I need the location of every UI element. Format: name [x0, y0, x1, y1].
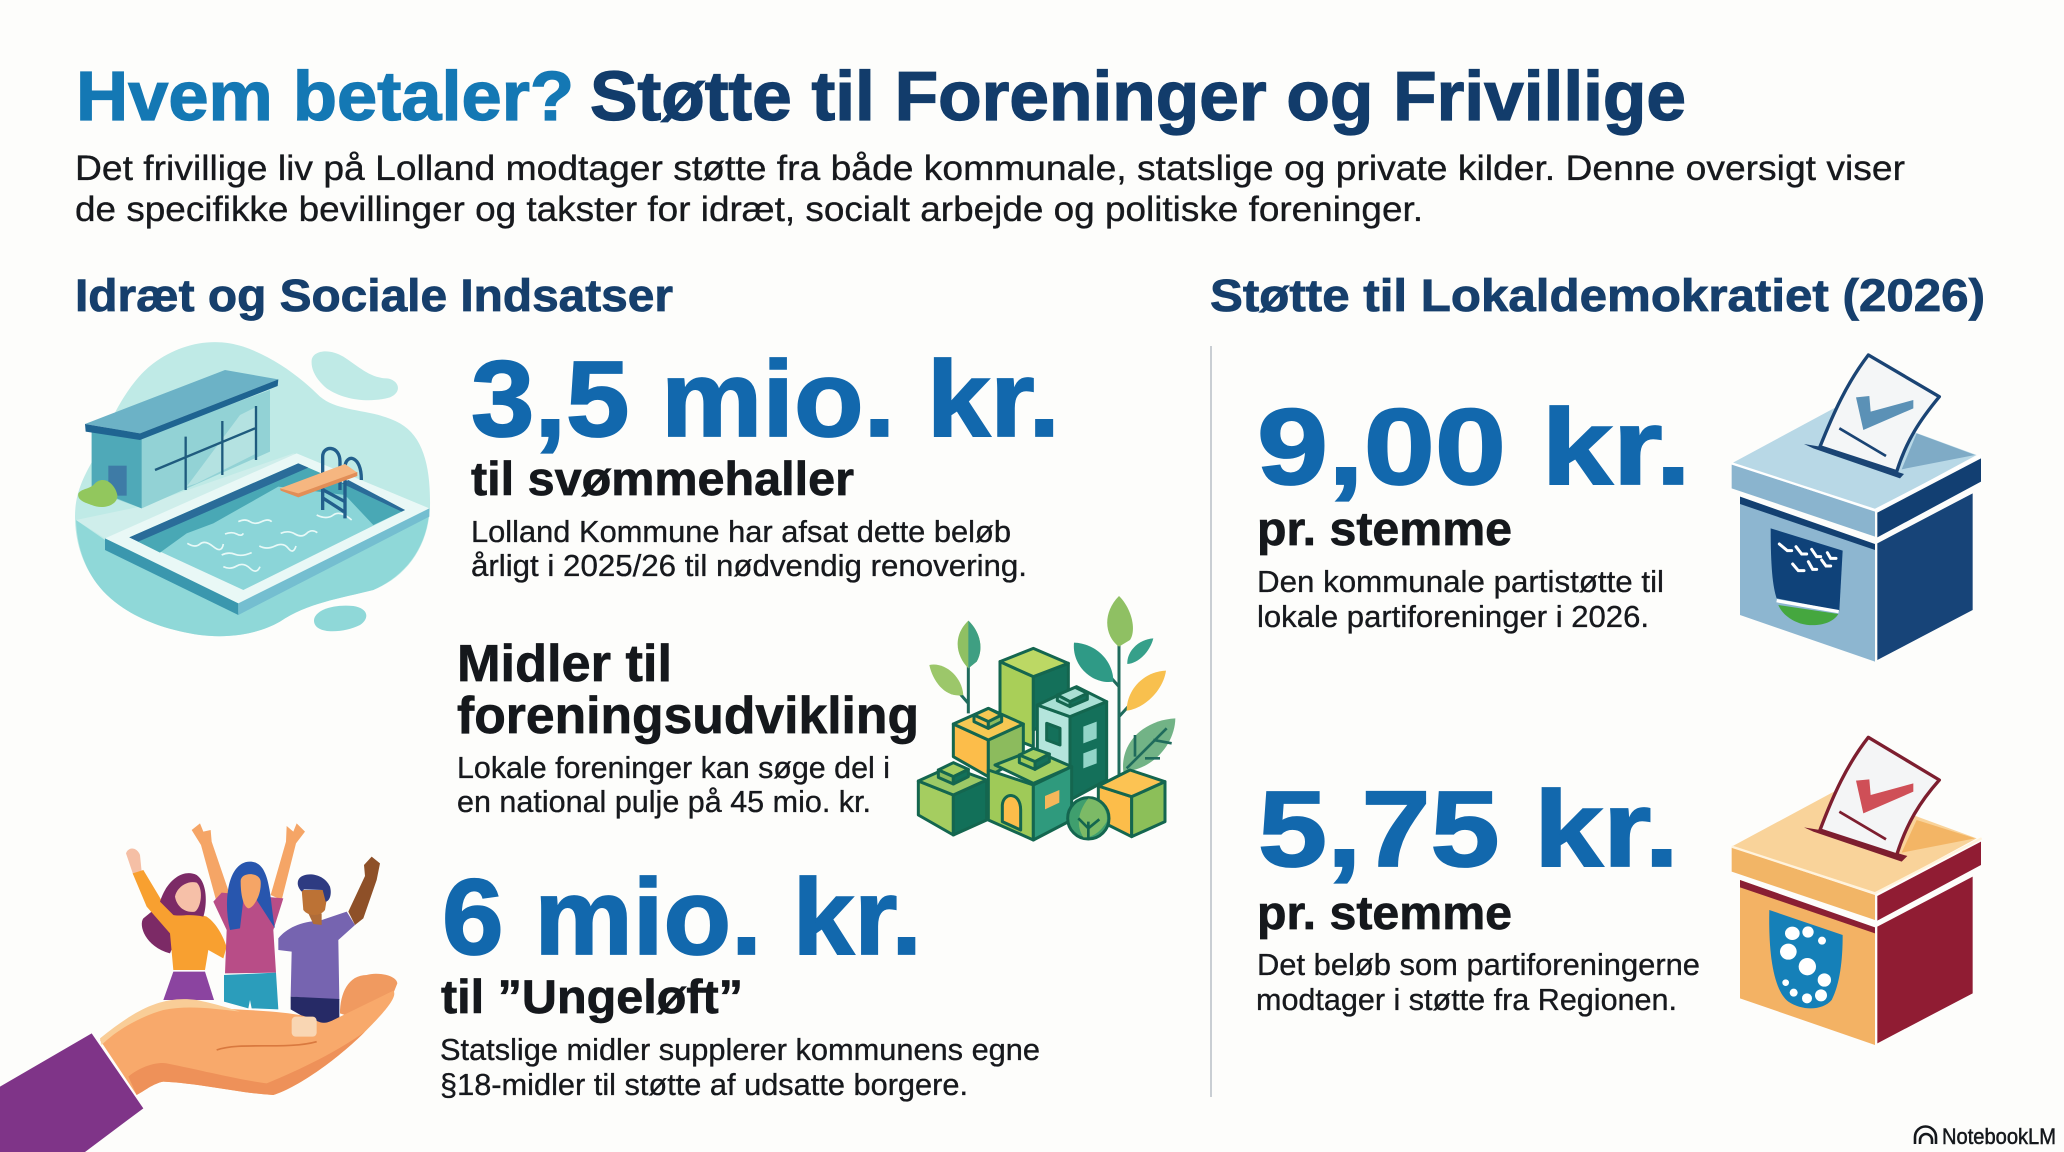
building — [92, 390, 270, 508]
heading: left section: Idræt og Sociale Indsatser — [75, 270, 673, 321]
icon: green buildings with plants — [918, 596, 1175, 840]
pool — [105, 453, 429, 603]
stat: 3,5 mio. kr.: til svømmehaller — [471, 452, 854, 505]
woman centre — [192, 823, 229, 900]
palm — [100, 991, 394, 1095]
stat: 5,75 kr. pr. stemme: modtager i støtte fra Regionen. — [1256, 982, 1677, 1017]
stat: 9,00 kr. pr. stemme: 9,00 kr. — [1257, 386, 1691, 507]
tall — [1000, 662, 1033, 747]
stat: 6 mio. kr. — [440, 856, 1040, 1102]
icon: swimming pool — [75, 342, 430, 636]
title — [76, 57, 1686, 135]
stat: midler til foreningsudvikling: Midler til — [457, 635, 672, 693]
blue bldg — [1037, 705, 1070, 793]
stat: 9,00 kr. pr. stemme — [1257, 386, 1691, 634]
stat: 3,5 mio. kr.: 3,5 mio. kr. — [471, 338, 1060, 459]
people — [142, 897, 187, 953]
stat: 9,00 kr. pr. stemme: Den kommunale partistøtte til — [1257, 564, 1664, 599]
title: Hvem betaler? — [76, 57, 574, 135]
stat: midler til foreningsudvikling: en national pulje på 45 mio. kr. — [457, 784, 871, 819]
title: Støtte til Foreninger og Frivillige — [590, 57, 1686, 135]
intro text: Det frivillige liv på Lolland modtager støtte fra både kommunale, statslige og private kilder. Denne oversigt viser — [75, 149, 1905, 188]
stat: midler til foreningsudvikling — [457, 635, 919, 819]
stat: 3,5 mio. kr. — [471, 338, 1060, 583]
heading: right section: Støtte til Lokaldemokratiet (2026) — [1210, 270, 1985, 321]
icon: blue ballot box — [1732, 355, 1982, 662]
stat: 6 mio. kr.: §18-midler til støtte af udsatte borgere. — [440, 1067, 968, 1102]
divider — [1210, 346, 1212, 1097]
logo: NotebookLM: NotebookLM — [1942, 1124, 2056, 1149]
stat: 9,00 kr. pr. stemme: pr. stemme — [1257, 502, 1512, 555]
hand: back fingers — [340, 974, 397, 1020]
stat: 5,75 kr. pr. stemme: 5,75 kr. — [1258, 768, 1679, 889]
stat: 6 mio. kr.: 6 mio. kr. — [442, 856, 922, 977]
stat: 3,5 mio. kr.: Lolland Kommune har afsat dette beløb — [471, 514, 1011, 549]
stat: 6 mio. kr.: til ”Ungeløft” — [441, 970, 743, 1023]
icon: orange ballot box — [1732, 737, 1982, 1045]
center — [988, 770, 1033, 840]
stat: 5,75 kr. pr. stemme: pr. stemme — [1257, 886, 1512, 939]
sleeve — [0, 1033, 143, 1152]
yellow — [953, 724, 988, 777]
stat: 3,5 mio. kr.: årligt i 2025/26 til nødvendig renovering. — [471, 548, 1027, 583]
ladder — [323, 448, 361, 518]
right — [1098, 786, 1132, 837]
intro text — [75, 149, 1905, 229]
stat: 5,75 kr. pr. stemme — [1256, 768, 1700, 1017]
low left — [918, 781, 953, 835]
stat: midler til foreningsudvikling: foreningsudvikling — [457, 687, 919, 745]
stat: 6 mio. kr.: Statslige midler supplerer kommunens egne — [440, 1032, 1040, 1067]
stat: 9,00 kr. pr. stemme: lokale partiforeninger i 2026. — [1257, 599, 1649, 634]
man — [348, 857, 380, 925]
intro text: de specifikke bevillinger og takster for idræt, socialt arbejde og politiske foreninger. — [75, 190, 1423, 229]
stat: midler til foreningsudvikling: Lokale foreninger kan søge del i — [457, 750, 890, 785]
stat: 5,75 kr. pr. stemme: Det beløb som partiforeningerne — [1257, 947, 1700, 982]
icon: people on a supporting hand — [0, 823, 397, 1152]
